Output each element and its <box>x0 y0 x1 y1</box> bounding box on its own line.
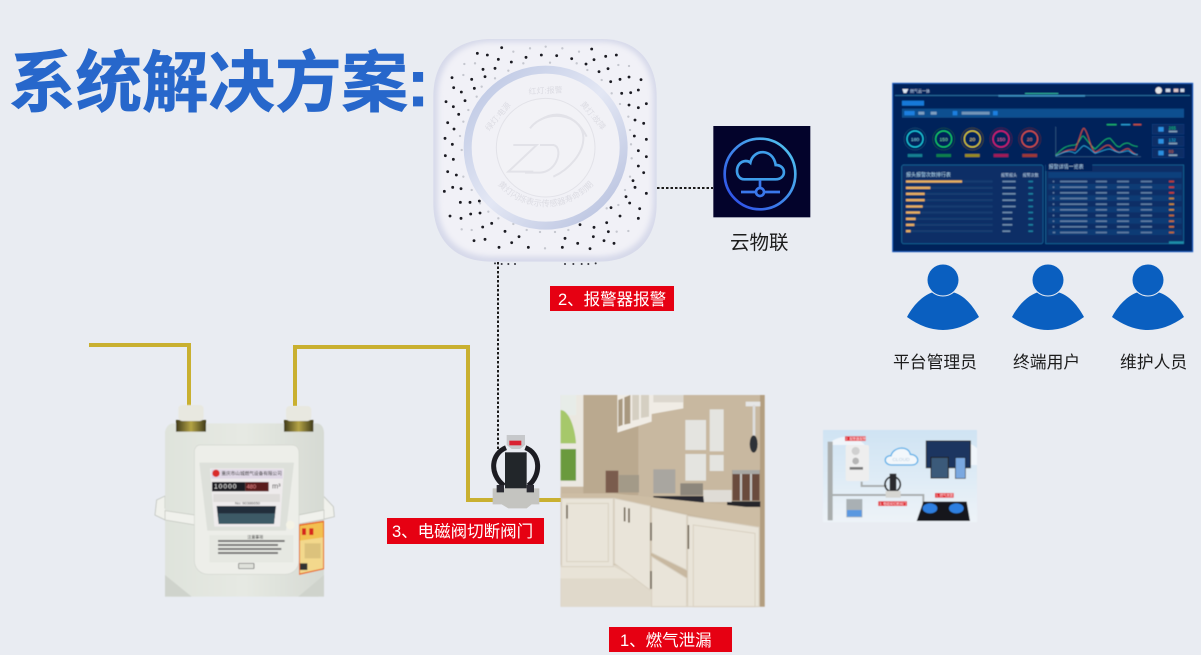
grey speaker holes <box>445 47 632 248</box>
small system diagram <box>823 430 977 522</box>
label 2: alarm: 2、报警器报警 <box>558 290 666 309</box>
label 1: gas leak <box>609 627 732 652</box>
label 3: valve: 3、电磁阀切断阀门 <box>392 522 533 541</box>
user label: terminal user: 终端用户 <box>1013 353 1080 372</box>
cabinet handles <box>567 505 688 589</box>
valve nuts <box>497 485 534 492</box>
label 1: gas leak: 1、燃气泄漏 <box>620 631 712 650</box>
dashboard ranking panel <box>902 165 1043 244</box>
dashboard ranking panel: 报警报头 <box>1001 171 1017 177</box>
countertop <box>561 493 760 527</box>
diagram label 3: 1. 燃气泄漏 <box>936 493 954 498</box>
diagram pipes <box>830 482 923 503</box>
diagram screens <box>926 441 970 478</box>
side wall <box>583 395 638 495</box>
valve metal base <box>493 488 539 508</box>
gas meter <box>155 405 334 597</box>
dashboard screen <box>893 83 1193 252</box>
ring printed text: 红灯:报警 <box>528 84 563 96</box>
label 2: alarm <box>550 286 674 311</box>
ZD logo emboss <box>508 115 587 177</box>
diagram label 2: 3. 电磁阀切断阀门 <box>879 501 907 506</box>
dashboard gauges: 150 <box>997 137 1005 143</box>
wall cabinet <box>617 395 683 433</box>
meter button <box>286 521 295 529</box>
dashboard stat cards: 132 <box>1169 138 1176 143</box>
meter body <box>165 423 324 597</box>
dashboard gauges: 20 <box>1027 137 1033 143</box>
diagram gas stove <box>917 502 970 521</box>
title: 系统解决方案: <box>9 47 429 121</box>
dashboard ranking panel: 报头报警次数排行表 <box>906 171 951 178</box>
meter dial panel <box>210 468 284 527</box>
wall reflections <box>685 409 724 481</box>
user icon: terminal user <box>1012 264 1084 330</box>
gas pipe: meter to valve and kitchen <box>295 347 561 500</box>
diagram cloud: CLOUD <box>892 457 910 463</box>
right wall strip <box>760 395 765 607</box>
bottom edge holes <box>495 260 596 267</box>
valve red light <box>509 441 521 445</box>
ring printed text: 绿灯:电源 <box>483 100 513 133</box>
meter notice: 注意事项 <box>247 534 263 540</box>
dashboard gauges: 20 <box>970 137 975 143</box>
cloud IoT icon <box>713 126 810 217</box>
ring printed text: 黄灯闪烁表示传感器寿命到期 <box>498 180 594 208</box>
meter dial panel: m³ <box>272 482 281 491</box>
cloud IoT label: 云物联 <box>730 232 789 254</box>
dashboard stat cards <box>1152 124 1184 158</box>
label 3: valve <box>387 518 544 544</box>
dashboard ranking panel: 报警次数 <box>1023 171 1039 177</box>
user icon: platform admin <box>907 264 979 330</box>
dashboard header <box>895 87 1190 97</box>
meter dial panel: 10000 <box>214 484 238 491</box>
ring printed text <box>483 84 608 208</box>
diagram label 1: 2. 报警器报警 <box>846 436 867 441</box>
diagram post <box>828 442 833 520</box>
user label: maintainer: 维护人员 <box>1120 353 1187 372</box>
hanging ladle <box>746 402 760 453</box>
user icon: maintainer <box>1112 264 1184 330</box>
dashboard line chart <box>1056 124 1141 157</box>
valve hose loop <box>494 448 538 486</box>
meter notice <box>209 534 293 562</box>
meter right connector <box>284 406 313 432</box>
dashboard alarm table <box>1046 162 1184 244</box>
dashboard gauges: 150 <box>940 137 948 143</box>
meter left connector <box>176 405 206 432</box>
diagram alarm <box>846 445 869 481</box>
dashboard stat cards: 89 <box>1169 149 1174 154</box>
kitchen floor <box>561 565 688 607</box>
meter warning sticker <box>299 521 324 575</box>
dotted line: alarm to valve <box>497 262 499 452</box>
meter dial panel: 480 <box>247 485 256 491</box>
dashboard stat cards: 265 <box>1169 126 1176 131</box>
meter latch <box>239 563 254 569</box>
base cabinets <box>562 498 759 607</box>
diagram meter <box>846 499 862 517</box>
meter front cover <box>194 445 299 574</box>
spice jars <box>727 470 760 507</box>
meter strap band <box>165 510 324 525</box>
gas pipe: left inlet <box>89 345 189 406</box>
ring printed text: 黄灯:故障 <box>578 99 608 132</box>
meter bottom shading <box>165 575 324 597</box>
meter dial panel: 重庆市山城燃气设备有限公司 <box>221 470 282 477</box>
valve cap <box>507 435 525 449</box>
kitchen photo <box>561 395 765 607</box>
centre disc <box>496 98 595 197</box>
valve actuator <box>505 452 527 488</box>
alarm device <box>434 39 658 265</box>
user label: platform admin: 平台管理员 <box>893 353 977 372</box>
diagram cloud <box>885 448 918 465</box>
dashboard gauges <box>904 128 1041 157</box>
dashboard filter bar <box>902 101 1184 118</box>
dashboard alarm table: 报警详情一览表 <box>1049 164 1084 171</box>
pots and stove <box>606 469 732 503</box>
diagram clouds <box>828 437 977 465</box>
meter side strap <box>155 496 334 521</box>
kitchen window <box>561 395 583 487</box>
black speaker holes <box>444 48 646 249</box>
solenoid valve <box>493 435 539 508</box>
dotted line: alarm to cloud <box>657 187 713 189</box>
diagram valve <box>885 474 901 498</box>
meter dial panel: No: 90386650 <box>235 500 261 505</box>
centre ring <box>468 70 624 226</box>
dashboard gauges: 180 <box>911 137 919 143</box>
dashboard header: 燃气云一体 <box>910 87 930 93</box>
